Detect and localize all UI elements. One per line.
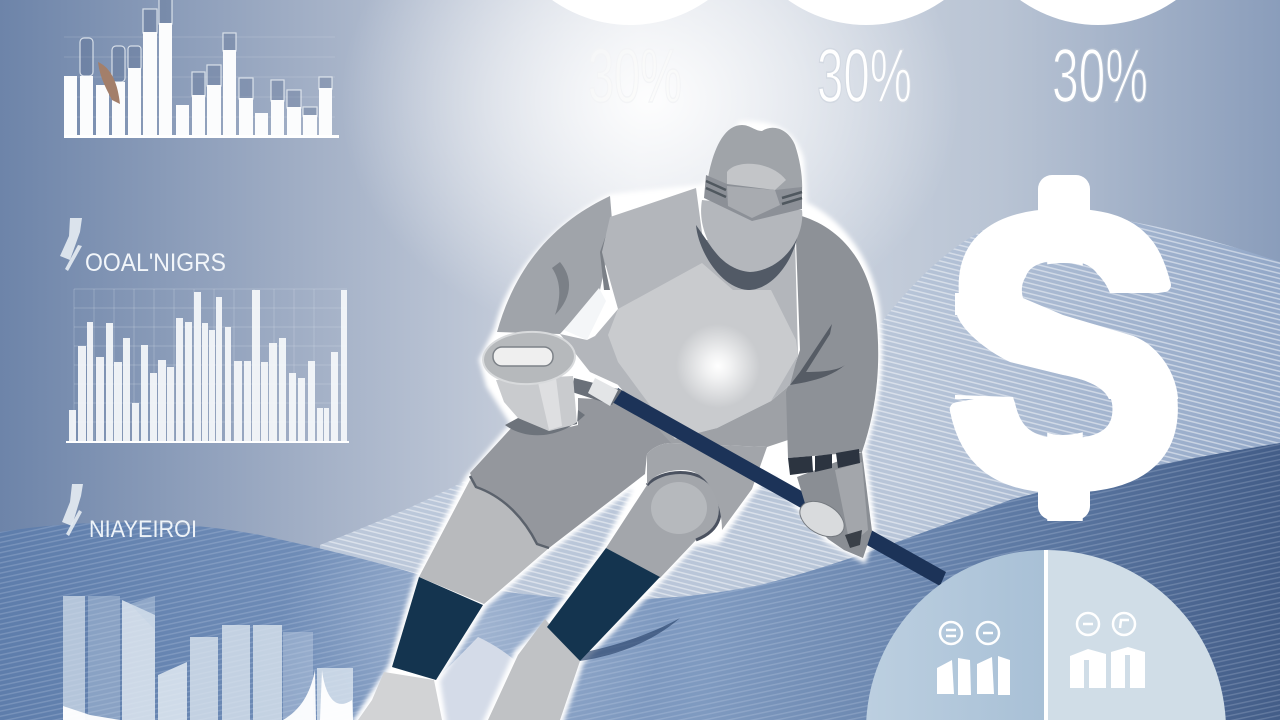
percentage one: 30% [588, 34, 682, 119]
left thigh [419, 480, 549, 604]
dollar sign: $ [951, 123, 1177, 576]
heading: goal numbers label: OOAL'NIGRS [85, 249, 226, 277]
knee outline [647, 472, 720, 540]
circle three [964, 0, 1232, 25]
chest glow [676, 324, 760, 408]
left forearm [560, 334, 625, 388]
white gap between arm and torso [564, 288, 606, 340]
shadow on ice [580, 618, 680, 661]
building icons [937, 647, 1145, 695]
left half [866, 550, 1046, 720]
chest panel [608, 263, 798, 439]
mask [701, 200, 802, 272]
visor opening [727, 164, 786, 190]
back wave: fine light lines [320, 214, 1280, 600]
heading: bottom chart label: NIAYEIROI [89, 516, 197, 543]
right glove [788, 449, 872, 558]
left sleeve [497, 196, 612, 334]
right shin guard [547, 548, 660, 661]
right skate [488, 619, 580, 720]
hockey stick [572, 378, 946, 586]
knee cap [651, 482, 707, 534]
circle two [732, 0, 1000, 25]
collar [696, 225, 797, 290]
percentage two: 30% [817, 34, 912, 119]
right knee and shin [606, 472, 720, 578]
torso upper [595, 188, 798, 439]
icon: left label marker two [62, 484, 83, 536]
sleeve shadow [552, 218, 612, 315]
icon: left label marker one [60, 218, 82, 271]
helmet [708, 125, 802, 195]
front wave: dark blue lines [0, 443, 1280, 720]
panel: top white circles with percentages [496, 0, 1232, 119]
shorts [470, 398, 683, 548]
percentage three: 30% [1052, 34, 1148, 119]
right thigh [647, 443, 767, 530]
lower torso [618, 385, 790, 447]
left shin guard [392, 577, 483, 680]
sleeve crease [790, 324, 845, 385]
left glove [482, 330, 585, 435]
panel: top-left bar chart [64, 0, 339, 138]
ice patch between skates [436, 637, 522, 720]
circular icons [940, 613, 1135, 644]
right half [1046, 550, 1226, 720]
panel: middle bar chart [66, 289, 349, 443]
helmet strap [704, 175, 802, 221]
left skate [358, 672, 442, 720]
circle one [496, 0, 764, 25]
panel: bottom-left translucent bar chart [63, 596, 353, 720]
right sleeve [786, 215, 878, 458]
hockey player illustration [358, 125, 946, 720]
shorts hem [470, 476, 549, 548]
panel: bottom semicircle with icons [866, 550, 1226, 720]
